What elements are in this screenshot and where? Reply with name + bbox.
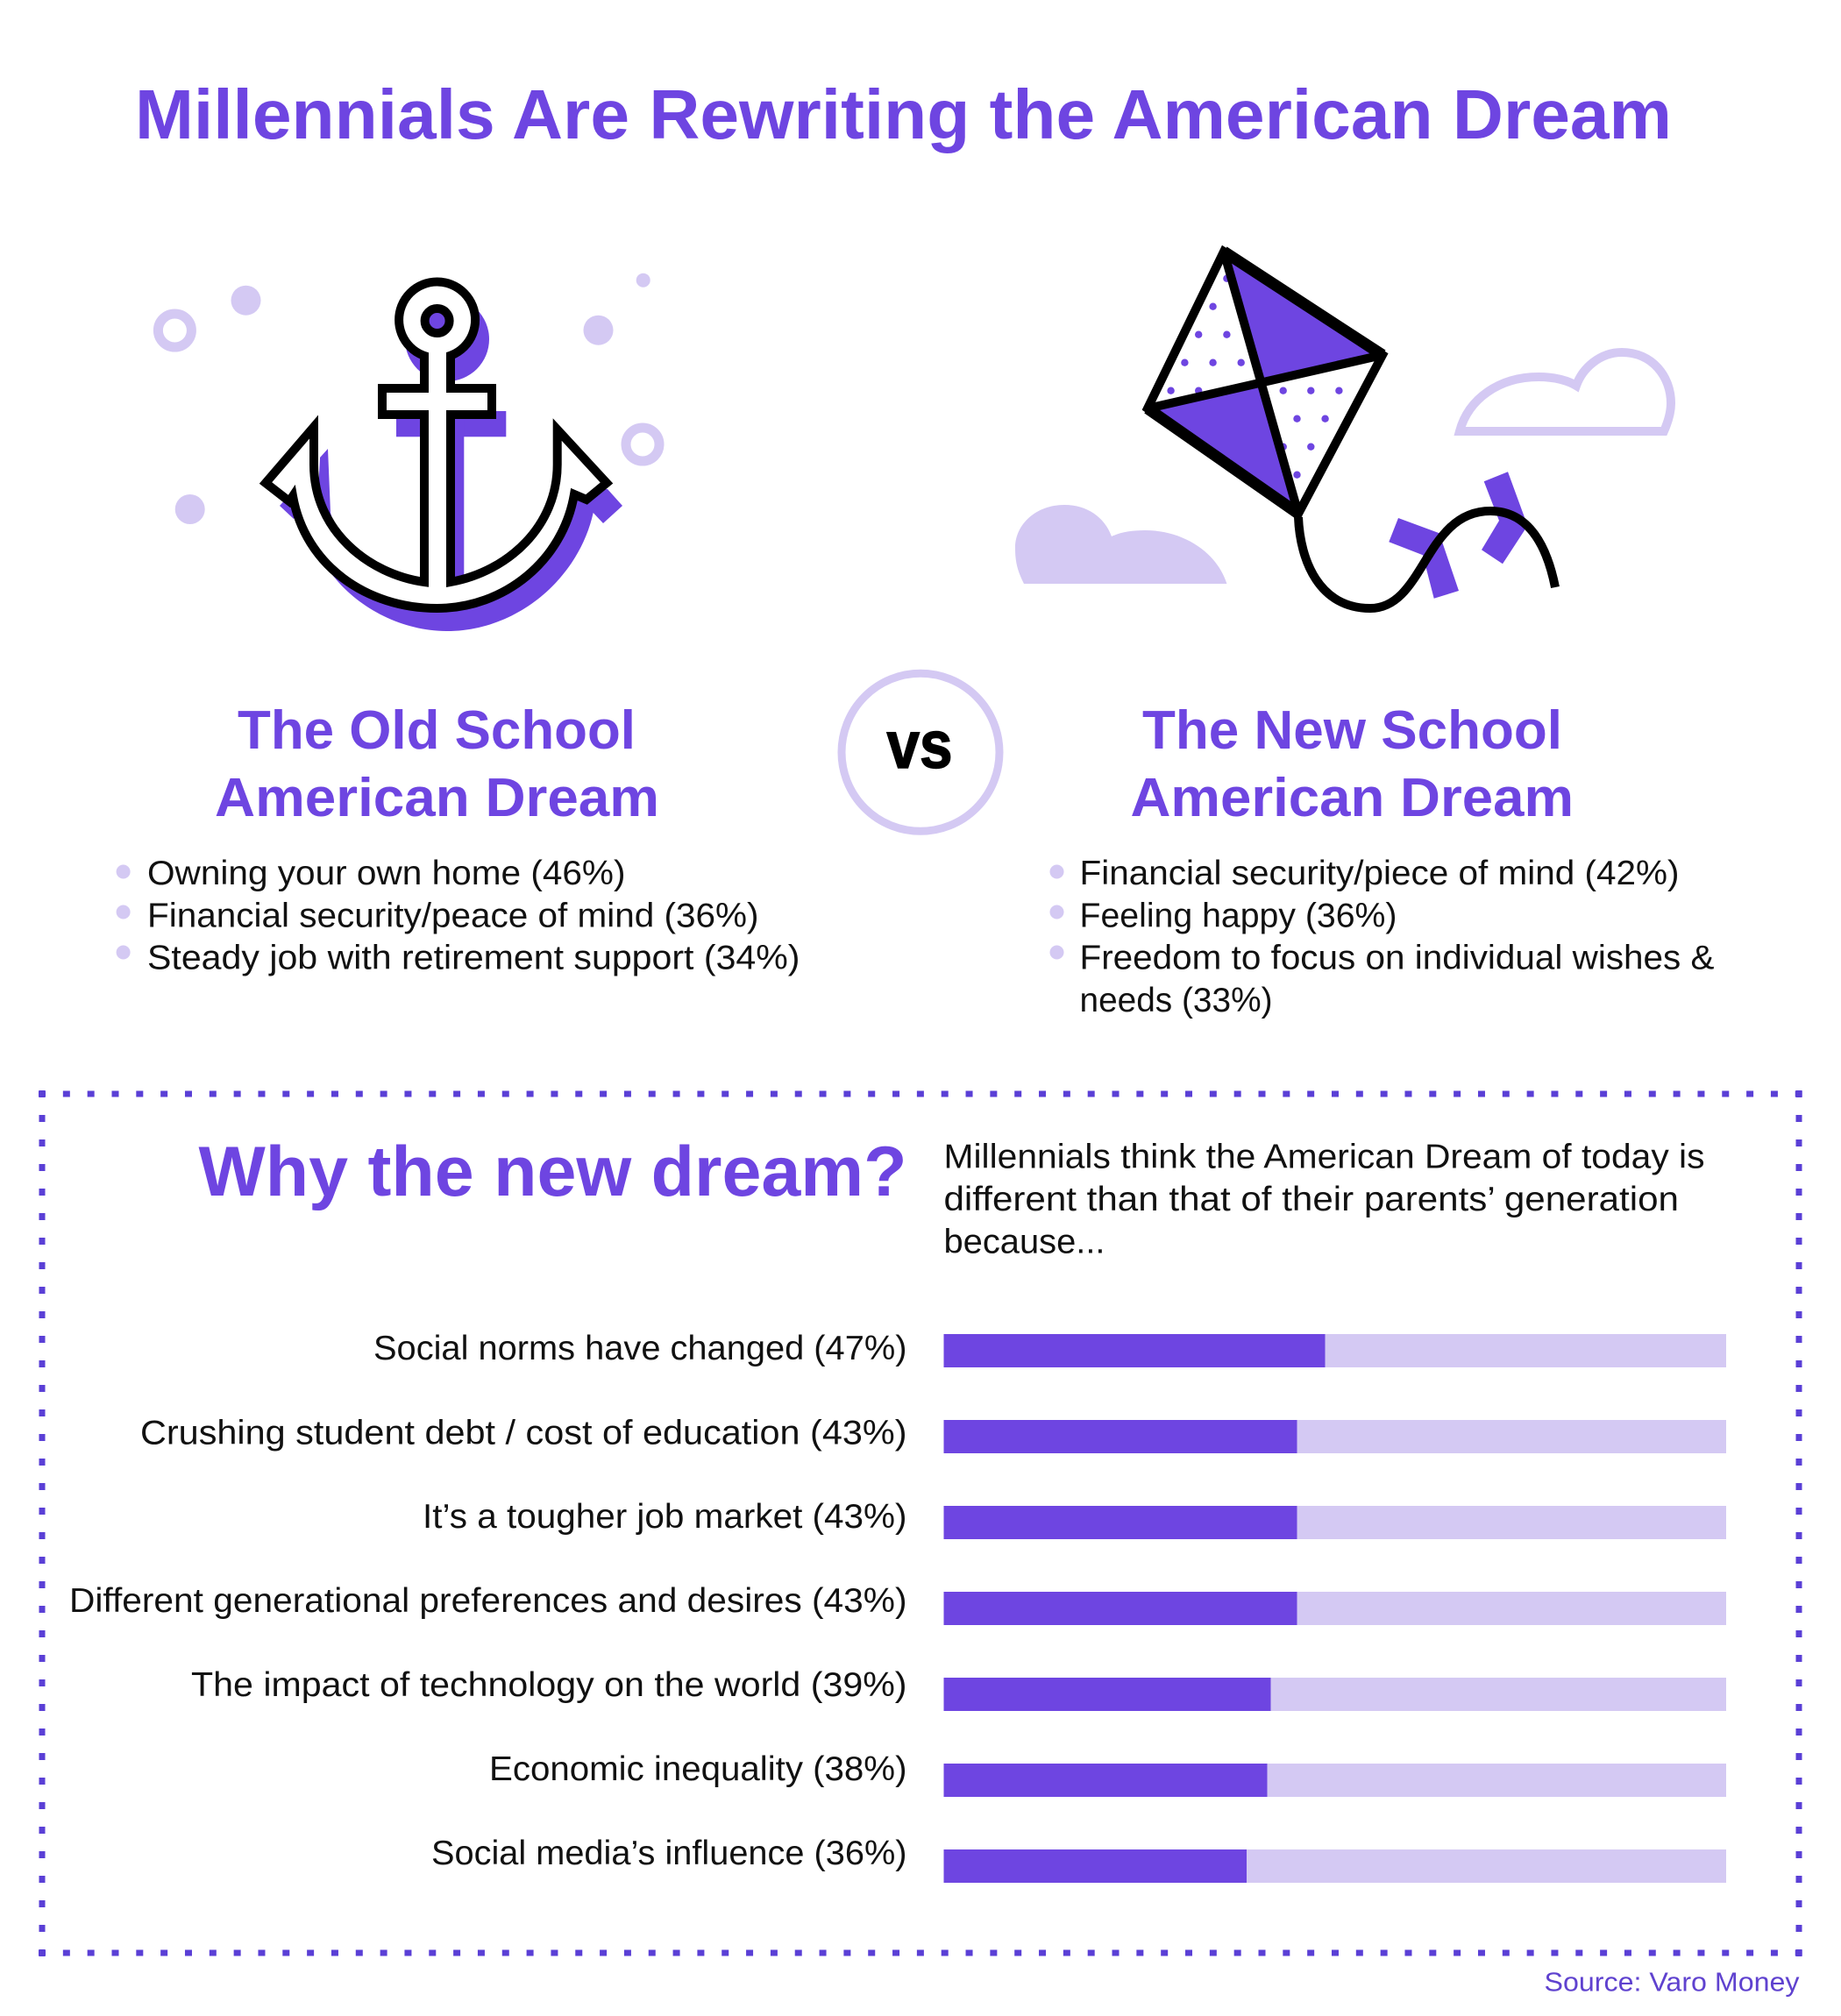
heading: new school: The New School bbox=[1142, 700, 1562, 761]
row: social media: Social media’s influence (36%) bbox=[431, 1835, 906, 1872]
icon: kite with clouds bbox=[1015, 252, 1671, 608]
list: old school: Steady job with retirement support (34%) bbox=[147, 940, 800, 976]
list: old school: Financial security/peace of mind (36%) bbox=[147, 898, 759, 934]
list: new school bbox=[1050, 855, 1715, 1019]
row: technology bbox=[191, 1666, 1726, 1711]
heading: old school: American Dream bbox=[215, 768, 659, 828]
heading: old school bbox=[215, 700, 659, 828]
list: old school bbox=[117, 855, 800, 976]
row: economic inequality: Economic inequality (38%) bbox=[489, 1750, 906, 1788]
anchor outline bbox=[266, 282, 607, 608]
kite dots bbox=[1167, 275, 1343, 479]
row: technology: The impact of technology on the world (39%) bbox=[191, 1666, 906, 1704]
kite tail ribbons bbox=[1389, 472, 1525, 599]
intro text: because... bbox=[943, 1224, 1105, 1260]
list: new school: Financial security/piece of mind (42%) bbox=[1080, 855, 1680, 892]
row: job market: It’s a tougher job market (43%) bbox=[423, 1498, 906, 1536]
panel heading: Why the new dream? bbox=[198, 1132, 906, 1211]
dotted border bbox=[39, 1090, 1802, 1956]
list: new school: Feeling happy (36%) bbox=[1080, 898, 1397, 934]
anchor shadow bbox=[280, 297, 622, 631]
list: new school: Freedom to focus on individual wishes & bbox=[1080, 940, 1715, 976]
row: job market bbox=[423, 1498, 1726, 1539]
kite body bbox=[1148, 252, 1383, 514]
bar chart bbox=[69, 1330, 1726, 1883]
row: social norms: Social norms have changed (47%) bbox=[373, 1330, 906, 1367]
list: new school: needs (33%) bbox=[1080, 982, 1273, 1019]
filled cloud bbox=[1015, 505, 1226, 584]
source note: Source: Varo Money bbox=[1545, 1967, 1800, 1997]
vs badge bbox=[842, 673, 999, 831]
heading: new school bbox=[1131, 700, 1574, 828]
row: student debt bbox=[140, 1415, 1726, 1453]
row: social media bbox=[431, 1835, 1726, 1883]
decorative bubbles bbox=[158, 273, 659, 524]
icon: anchor with bubbles bbox=[158, 273, 659, 631]
list: old school: Owning your own home (46%) bbox=[147, 855, 626, 892]
kite string bbox=[1298, 511, 1555, 608]
heading: new school: American Dream bbox=[1131, 768, 1574, 828]
row: social norms bbox=[373, 1330, 1726, 1367]
row: economic inequality bbox=[489, 1750, 1726, 1797]
panel: why the new dream bbox=[39, 1090, 1802, 1956]
vs badge: vs bbox=[887, 708, 952, 783]
row: generational preferences bbox=[69, 1582, 1726, 1625]
intro text bbox=[943, 1138, 1704, 1260]
title: Millennials Are Rewriting the American Dream bbox=[135, 75, 1672, 153]
intro text: different than that of their parents’ generation bbox=[943, 1181, 1679, 1218]
row: student debt: Crushing student debt / cost of education (43%) bbox=[140, 1415, 906, 1452]
intro text: Millennials think the American Dream of today is bbox=[943, 1138, 1704, 1176]
row: generational preferences: Different generational preferences and desires (43%) bbox=[69, 1582, 906, 1620]
heading: old school: The Old School bbox=[238, 700, 636, 761]
outlined cloud bbox=[1460, 352, 1671, 431]
